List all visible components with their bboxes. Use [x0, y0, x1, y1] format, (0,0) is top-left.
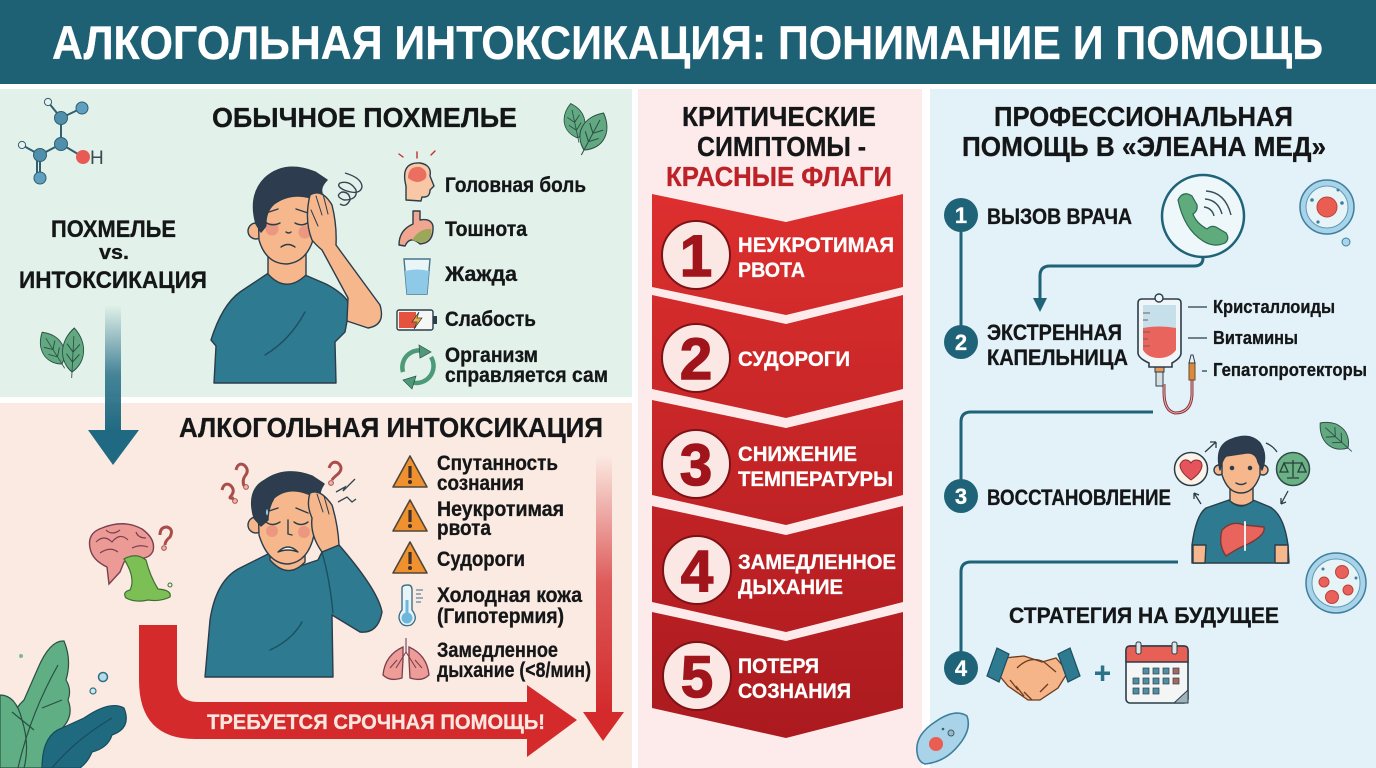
red flag 2: 2: [680, 327, 712, 392]
red flag 5: [652, 612, 903, 738]
symptom: body copes: справляется сам: [445, 364, 608, 387]
panel: alcohol intoxication: [0, 403, 632, 768]
arrow: red vertical arrow: [583, 455, 624, 741]
panel: critical symptoms: [638, 89, 922, 768]
red flag 5: ПОТЕРЯ: [738, 655, 819, 678]
symptom: confusion: Спутанность: [437, 452, 558, 475]
step 1 call doctor: 1: [955, 203, 967, 228]
red flag 3: СНИЖЕНИЕ: [738, 443, 857, 466]
drip ingredient labels: [1188, 297, 1367, 380]
symptom: cold skin: [399, 584, 582, 628]
red flag 4: ЗАМЕДЛЕННОЕ: [738, 551, 896, 574]
symptom: slow breathing: Замедленное: [437, 639, 558, 662]
step 2 emergency drip: [944, 320, 1128, 370]
red flag 3: ТЕМПЕРАТУРЫ: [738, 468, 893, 491]
symptom: seizures: Судороги: [437, 548, 525, 571]
icon: dizziness spiral: [338, 173, 362, 205]
symptom: slow breathing: дыхание (<8/мин): [437, 659, 591, 682]
illustration: decorative foliage: [0, 641, 126, 768]
symptom: confusion: сознания: [437, 472, 524, 495]
illustration: recovered man with liver: [1192, 436, 1289, 563]
symptom: confusion: [393, 452, 558, 495]
versus label: [19, 216, 207, 294]
title banner: [0, 0, 1376, 84]
step 2 emergency drip: 2: [955, 330, 967, 355]
symptom: cold skin: Холодная кожа: [437, 584, 582, 607]
step 4 badge: 4: [955, 656, 968, 681]
red flag 2: СУДОРОГИ: [738, 348, 850, 371]
red flag 2: [652, 295, 903, 418]
symptom: body copes: [402, 344, 608, 389]
icon: heart badge: [1174, 452, 1208, 486]
icon: handshake: [987, 648, 1080, 700]
icon: IV drip bag: [1138, 294, 1195, 413]
red flag 4: [652, 506, 903, 632]
symptom: seizures: [393, 542, 525, 573]
heading: critical symptoms red flags: СИМПТОМЫ -: [697, 131, 866, 162]
heading: professional help: ПРОФЕССИОНАЛЬНАЯ: [994, 101, 1293, 132]
red flag 1: НЕУКРОТИМАЯ: [738, 234, 894, 257]
icon: phone: [1162, 175, 1244, 257]
plus sign: [1095, 666, 1110, 681]
icon: ethanol molecule: [18, 98, 104, 184]
strategy heading: СТРАТЕГИЯ НА БУДУЩЕЕ: [1009, 603, 1279, 628]
heading: critical symptoms red flags: КРАСНЫЕ ФЛАГИ: [666, 161, 892, 192]
symptom: headache: [399, 151, 586, 201]
red flag 5: СОЗНАНИЯ: [738, 680, 851, 703]
symptom: cold skin: (Гипотермия): [437, 605, 564, 628]
red flag 5: 5: [681, 645, 713, 710]
icon: calendar: [1126, 642, 1188, 703]
icon: brain with vomit: [90, 524, 172, 601]
symptom: nausea: [399, 211, 527, 246]
icon: balance badge: [1276, 452, 1310, 486]
icon: bacterium: [917, 713, 968, 764]
red flag 1: 1: [680, 224, 712, 289]
red flag 3: [652, 400, 903, 525]
heading: critical symptoms red flags: КРИТИЧЕСКИЕ: [682, 101, 876, 132]
step 3 recovery: 3: [955, 484, 967, 509]
symptom: thirst: Жажда: [444, 263, 517, 286]
red flag 4: 4: [681, 539, 713, 604]
illustration: man with intoxication: [205, 472, 382, 677]
red flag 3: 3: [680, 433, 712, 498]
step 1 call doctor: ВЫЗОВ ВРАЧА: [987, 204, 1132, 229]
icons: question marks and shocks: [222, 462, 356, 503]
symptom: nausea: Тошнота: [445, 218, 527, 241]
icon: leaf right: [1313, 415, 1359, 460]
symptom: thirst: [404, 259, 517, 294]
heading: ordinary hangover: ОБЫЧНОЕ ПОХМЕЛЬЕ: [212, 102, 517, 133]
drip ingredient labels: Кристаллоиды: [1213, 297, 1335, 317]
icon: ethanol molecule: H: [90, 148, 104, 169]
step 2 emergency drip: ЭКСТРЕННАЯ: [987, 320, 1122, 345]
symptom: body copes: Организм: [445, 344, 538, 367]
step 1 call doctor: [944, 198, 1132, 232]
connector lines: [961, 215, 1203, 668]
step 2 emergency drip: КАПЕЛЬНИЦА: [987, 345, 1128, 370]
arrow: urgent help required: [139, 625, 577, 757]
versus label: ПОХМЕЛЬЕ: [51, 216, 176, 243]
illustration: man with hangover: [211, 167, 382, 383]
heading: professional help: [962, 101, 1326, 162]
symptom: uncontrollable vomiting: Неукротимая: [437, 498, 564, 521]
step 3 recovery: [944, 479, 1171, 513]
small cycle arrows: [1194, 442, 1288, 504]
arrow: hangover to intoxication: [88, 305, 139, 465]
versus label: vs.: [99, 242, 129, 264]
icon: petri dish lower: [1306, 553, 1366, 613]
arrow: urgent help required: ТРЕБУЕТСЯ СРОЧНАЯ ПОМОЩЬ!: [207, 711, 545, 734]
heading: professional help: ПОМОЩЬ В «ЭЛЕАНА МЕД»: [962, 131, 1326, 162]
symptom: uncontrollable vomiting: [393, 498, 564, 540]
step 4 badge: [944, 651, 978, 685]
icon: petri dish top: [1300, 180, 1354, 246]
red flag 4: ДЫХАНИЕ: [738, 576, 843, 599]
drip ingredient labels: Витамины: [1213, 328, 1298, 348]
symptom: weakness: Слабость: [445, 308, 536, 331]
symptom: headache: Головная боль: [445, 174, 586, 197]
panel: ordinary hangover: [0, 89, 632, 397]
drip ingredient labels: Гепатопротекторы: [1213, 360, 1367, 380]
heading: alcohol intoxication: АЛКОГОЛЬНАЯ ИНТОКСИКАЦИЯ: [179, 412, 603, 443]
arrow head: call to drip: [1033, 298, 1047, 312]
heading: critical symptoms red flags: [666, 101, 892, 192]
step 3 recovery: ВОССТАНОВЛЕНИЕ: [987, 485, 1171, 510]
icon: leaves left: [33, 327, 85, 379]
symptom: slow breathing: [383, 638, 591, 682]
red flag 1: [652, 194, 903, 315]
versus label: ИНТОКСИКАЦИЯ: [19, 267, 207, 294]
symptom: uncontrollable vomiting: рвота: [437, 517, 491, 540]
symptom: weakness: [397, 308, 536, 331]
panel: professional help: [917, 89, 1376, 768]
icon: leaves top right: [561, 101, 615, 161]
red flag 1: РВОТА: [738, 259, 805, 282]
